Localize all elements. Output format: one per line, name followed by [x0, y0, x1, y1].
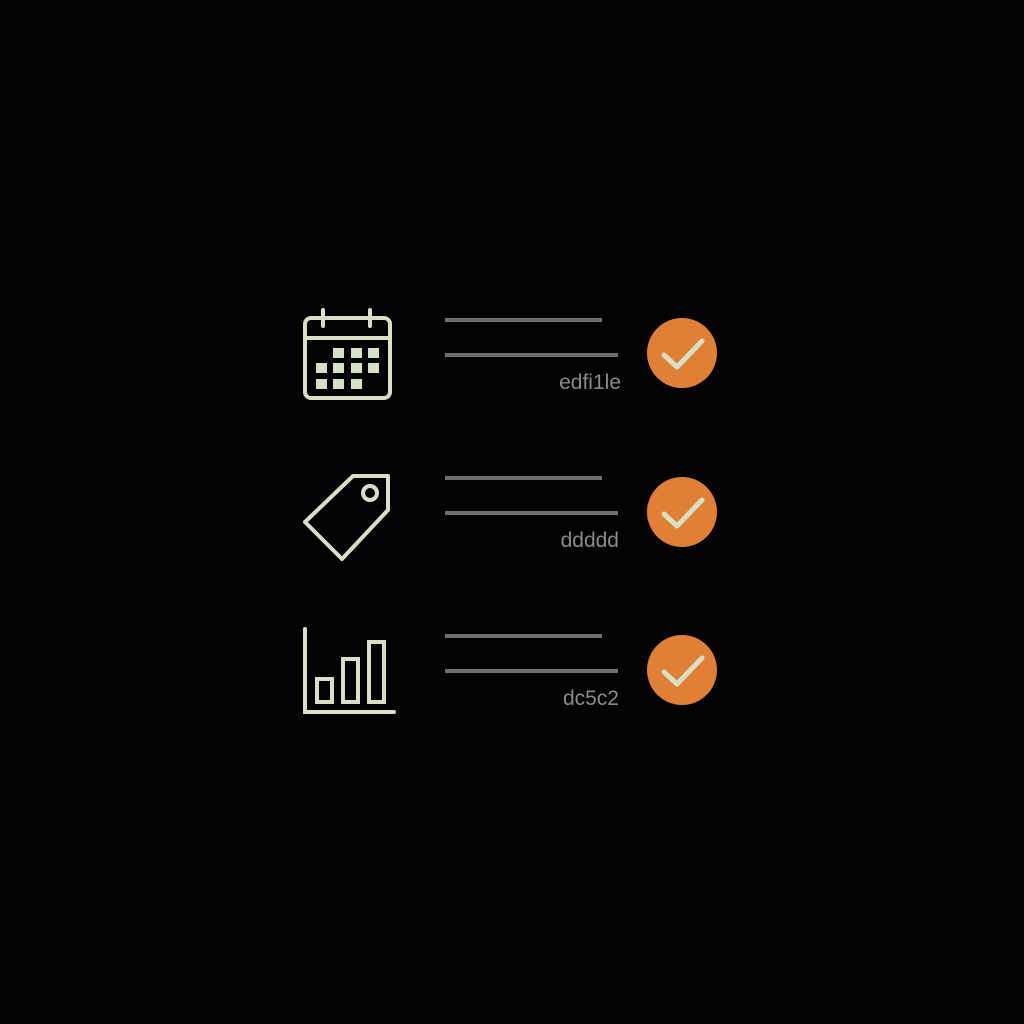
icon: tag — [305, 476, 388, 559]
text lines — [445, 478, 618, 513]
row 1: calendar — [305, 310, 717, 398]
label: dc5c2 — [563, 687, 619, 710]
row 3: bar chart — [305, 629, 717, 712]
check badge — [647, 635, 717, 705]
check badge — [647, 477, 717, 547]
icon: bar chart — [305, 629, 394, 712]
icon: calendar — [305, 310, 390, 398]
text lines — [445, 636, 618, 671]
text lines — [445, 320, 618, 355]
label: ddddd — [561, 529, 619, 552]
row 2: tag — [305, 476, 717, 559]
label: edfi1le — [559, 371, 621, 394]
check badge — [647, 318, 717, 388]
